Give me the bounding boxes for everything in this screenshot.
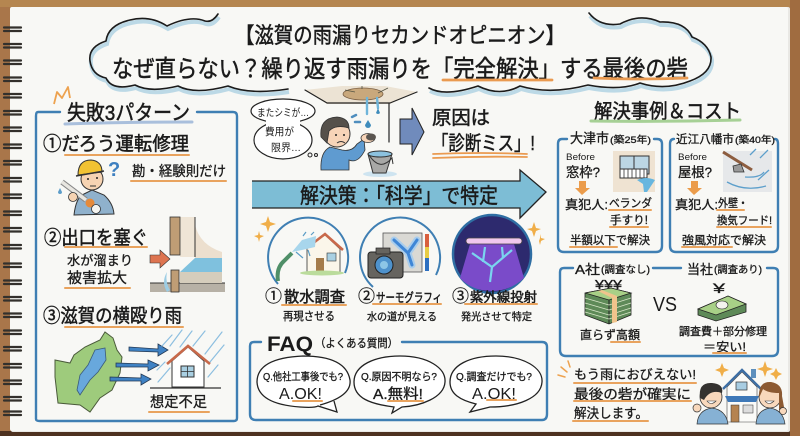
panel: cost comparison: ¥ bbox=[711, 280, 725, 296]
panel: Omihachiman case: (築40年) bbox=[735, 134, 775, 146]
method 1 label bbox=[265, 287, 346, 323]
method 3 label: 紫外線投射 bbox=[470, 290, 537, 305]
FAQ subheading: （よくある質問） bbox=[315, 336, 398, 350]
panel: Omihachiman case: 強風対応で解決 bbox=[682, 233, 767, 247]
title cloud bbox=[90, 13, 712, 95]
FAQ bubble 1: A.OK! bbox=[279, 386, 322, 403]
spiral binding bbox=[4, 28, 21, 415]
panel: failure patterns: 被害拡大 bbox=[67, 270, 127, 287]
pattern 2 heading: ②出口を塞ぐ bbox=[44, 227, 148, 249]
panel: Omihachiman case: 屋根? bbox=[678, 165, 712, 180]
arrow to diagnosis bbox=[400, 108, 424, 155]
icon: worried person bbox=[321, 115, 376, 170]
diagnosis text: 原因は bbox=[432, 108, 490, 129]
icon: small money stack bbox=[698, 296, 746, 321]
icon: veranda window bbox=[613, 151, 655, 192]
FAQ bubble 2: Q.原因不明なら? bbox=[361, 371, 437, 383]
solution arrow banner bbox=[252, 170, 546, 218]
panel: Omihachiman case bbox=[670, 132, 778, 252]
diagnosis text: 「診断ミス」! bbox=[432, 132, 535, 155]
sparkles bbox=[254, 216, 545, 245]
panel: cost comparison: A社 bbox=[575, 262, 600, 277]
method 3: ultraviolet bbox=[453, 215, 531, 293]
panel: Omihachiman case: 外壁・ bbox=[718, 197, 748, 210]
method 1 label: 再現させる bbox=[283, 310, 335, 323]
thought bubbles bbox=[251, 99, 318, 159]
panel: Otsu case: 手すり! bbox=[610, 213, 648, 227]
FAQ bubble 1 bbox=[257, 356, 350, 412]
panel: Omihachiman case: 換気フード! bbox=[717, 213, 772, 227]
thought bubbles: 費用が bbox=[265, 125, 294, 138]
panel: Otsu case: 半額以下で解決 bbox=[570, 233, 650, 247]
panel: Otsu case: 大津市 bbox=[570, 131, 609, 146]
diagnosis text bbox=[432, 108, 535, 158]
FAQ bubble 3: A.OK! bbox=[472, 386, 516, 403]
pattern 3 note: 想定不足 bbox=[150, 394, 207, 411]
FAQ bubble 1: Q.他社工事後でも? bbox=[263, 370, 343, 383]
solution arrow banner: 解決策：「科学」で特定 bbox=[300, 185, 498, 208]
panel: Otsu case bbox=[558, 131, 662, 252]
panel: Otsu case: (築25年) bbox=[610, 134, 651, 146]
title text bbox=[112, 23, 688, 83]
panel: failure patterns bbox=[36, 87, 237, 421]
arrow down bbox=[687, 181, 702, 195]
FAQ heading: FAQ bbox=[267, 333, 313, 356]
FAQ bubble 3: Q.調査だけでも? bbox=[456, 370, 532, 383]
VS label: VS bbox=[653, 294, 677, 316]
thought bubbles: 限界… bbox=[271, 142, 301, 154]
closing message: もう雨におびえない! bbox=[574, 367, 696, 382]
heading: failure patterns: 失敗3パターン bbox=[67, 102, 190, 125]
rain streaks bbox=[157, 330, 224, 382]
wind arrows bbox=[110, 344, 168, 385]
panel: Otsu case: ベランダ bbox=[609, 196, 652, 210]
icon: staff and house bbox=[693, 369, 786, 424]
pattern 3 heading: ③滋賀の横殴り雨 bbox=[43, 305, 182, 327]
panel: Otsu case: 真犯人: bbox=[565, 198, 608, 212]
icon: worker with caulking gun: ? bbox=[108, 159, 120, 181]
FAQ bubble 2: A.無料! bbox=[373, 386, 423, 403]
panel: Omihachiman case: 真犯人: bbox=[675, 198, 718, 212]
panel: cost comparison bbox=[560, 262, 778, 356]
method 2 label: サーモグラフィ bbox=[376, 291, 442, 305]
method 1 label: ① bbox=[265, 287, 282, 306]
closing message: 解決します。 bbox=[574, 406, 648, 421]
panel: cost comparison: 当社 bbox=[687, 262, 713, 277]
sparkles near house bbox=[715, 361, 782, 380]
scene: leaking ceiling bbox=[305, 86, 417, 142]
panel: Otsu case: 窓枠? bbox=[566, 165, 600, 180]
thought bubbles: またシミが… bbox=[257, 106, 309, 119]
pattern 1 note: 勘・経験則だけ bbox=[132, 163, 226, 179]
icon: vent hood in wind bbox=[723, 149, 772, 192]
FAQ bubble 2 bbox=[354, 356, 445, 413]
pattern 1 heading: ①だろう運転修理 bbox=[43, 133, 189, 155]
title text: なぜ直らない？繰り返す雨漏りを「完全解決」する最後の砦 bbox=[112, 56, 688, 83]
method 1: water test bbox=[268, 218, 348, 284]
method 3 label: 発光させて特定 bbox=[461, 310, 532, 323]
icon: tall money stack bbox=[585, 288, 631, 324]
method 2: thermography bbox=[360, 218, 440, 287]
closing message bbox=[558, 361, 696, 421]
method 2 label bbox=[358, 287, 442, 323]
icon: house bbox=[150, 346, 221, 388]
method 2 label: ② bbox=[358, 287, 375, 306]
panel: cost comparison: 調査費＋部分修理 bbox=[679, 324, 767, 338]
panel: cost comparison: 直らず高額 bbox=[580, 327, 640, 342]
title text: 【滋賀の雨漏りセカンドオピニオン】 bbox=[235, 23, 565, 48]
method 3 label bbox=[452, 287, 537, 323]
icon: worker with caulking gun bbox=[58, 159, 120, 215]
method 1 label: 散水調査 bbox=[284, 288, 345, 306]
panel: cost comparison: (調査あり) bbox=[714, 263, 762, 276]
panel: Omihachiman case: 近江八幡市 bbox=[676, 132, 734, 146]
heading: case studies and cost: 解決事例＆コスト bbox=[594, 100, 741, 123]
map of Shiga bbox=[55, 332, 122, 412]
FAQ bubble 3 bbox=[450, 356, 542, 412]
panel: cost comparison: ＝安い! bbox=[703, 340, 746, 354]
icon: wall cross section bbox=[150, 217, 225, 292]
arrow down bbox=[575, 181, 590, 195]
panel: cost comparison: (調査なし) bbox=[601, 263, 650, 276]
panel: Omihachiman case: Before bbox=[678, 152, 707, 163]
panel: FAQ bbox=[250, 333, 547, 420]
closing message: 最後の砦が確実に bbox=[574, 387, 691, 402]
panel: Otsu case: Before bbox=[566, 152, 595, 163]
icon: spark bbox=[54, 87, 70, 104]
icon: bucket bbox=[363, 151, 397, 177]
method 2 label: 水の道が見える bbox=[367, 310, 437, 323]
method 3 label: ③ bbox=[452, 287, 469, 306]
panel: cost comparison: ¥¥¥ bbox=[594, 278, 622, 292]
pattern 2 note: 水が溜まり bbox=[67, 253, 133, 268]
